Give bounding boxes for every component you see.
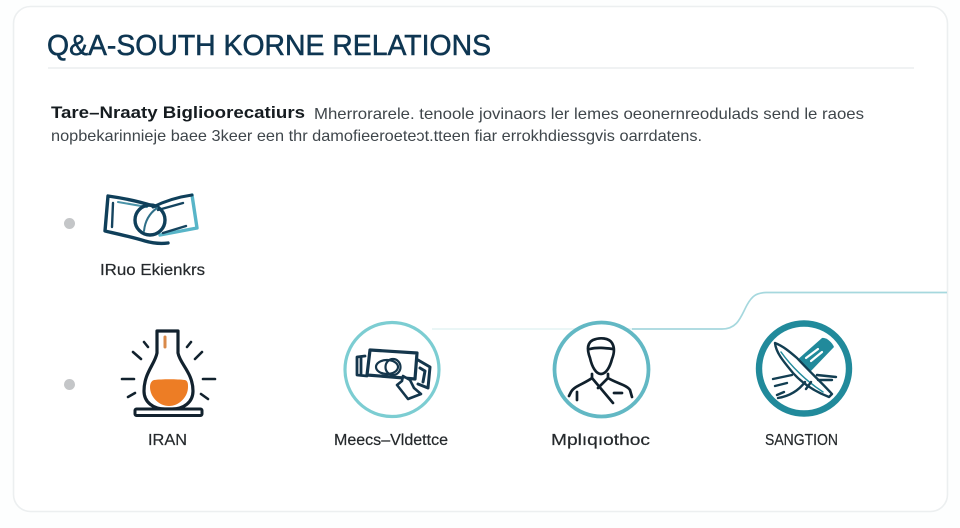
label: person icon: Mplıqıothoc <box>551 432 650 449</box>
icon: crossed knife and tool sanction <box>759 324 849 414</box>
label: row one icon: IRuo Ekienkrs <box>100 262 205 279</box>
icon: banknotes and ring <box>105 195 197 243</box>
text block: intro paragraph <box>51 104 864 145</box>
title: Q&A-SOUTH KORNE RELATIONS <box>47 30 491 62</box>
label: Sanction: SANGTION <box>765 432 838 449</box>
text block: intro paragraph: Mherrorarele. tenoole jovinaors ler lemes oeonernreodulads send le raoes <box>314 106 864 123</box>
icon: person portrait <box>554 322 648 416</box>
text block: intro paragraph: nopbekarinnieje baee 3keer een thr damofieeroeteɔt.tteen fiar errokhdiessgvis oarrdatens. <box>51 128 702 145</box>
bullet: row one <box>64 218 75 229</box>
label: IRAN: IRAN <box>148 432 187 449</box>
text block: intro paragraph: Tare–Nraaty Biglioorecatiurs <box>51 104 305 122</box>
bullet: row two <box>64 379 75 390</box>
icon: flask with orange liquid <box>122 331 215 416</box>
icon: money in hand <box>345 322 439 416</box>
label: money icon: Meecs–Vldettce <box>334 432 448 449</box>
connector line <box>432 292 947 329</box>
